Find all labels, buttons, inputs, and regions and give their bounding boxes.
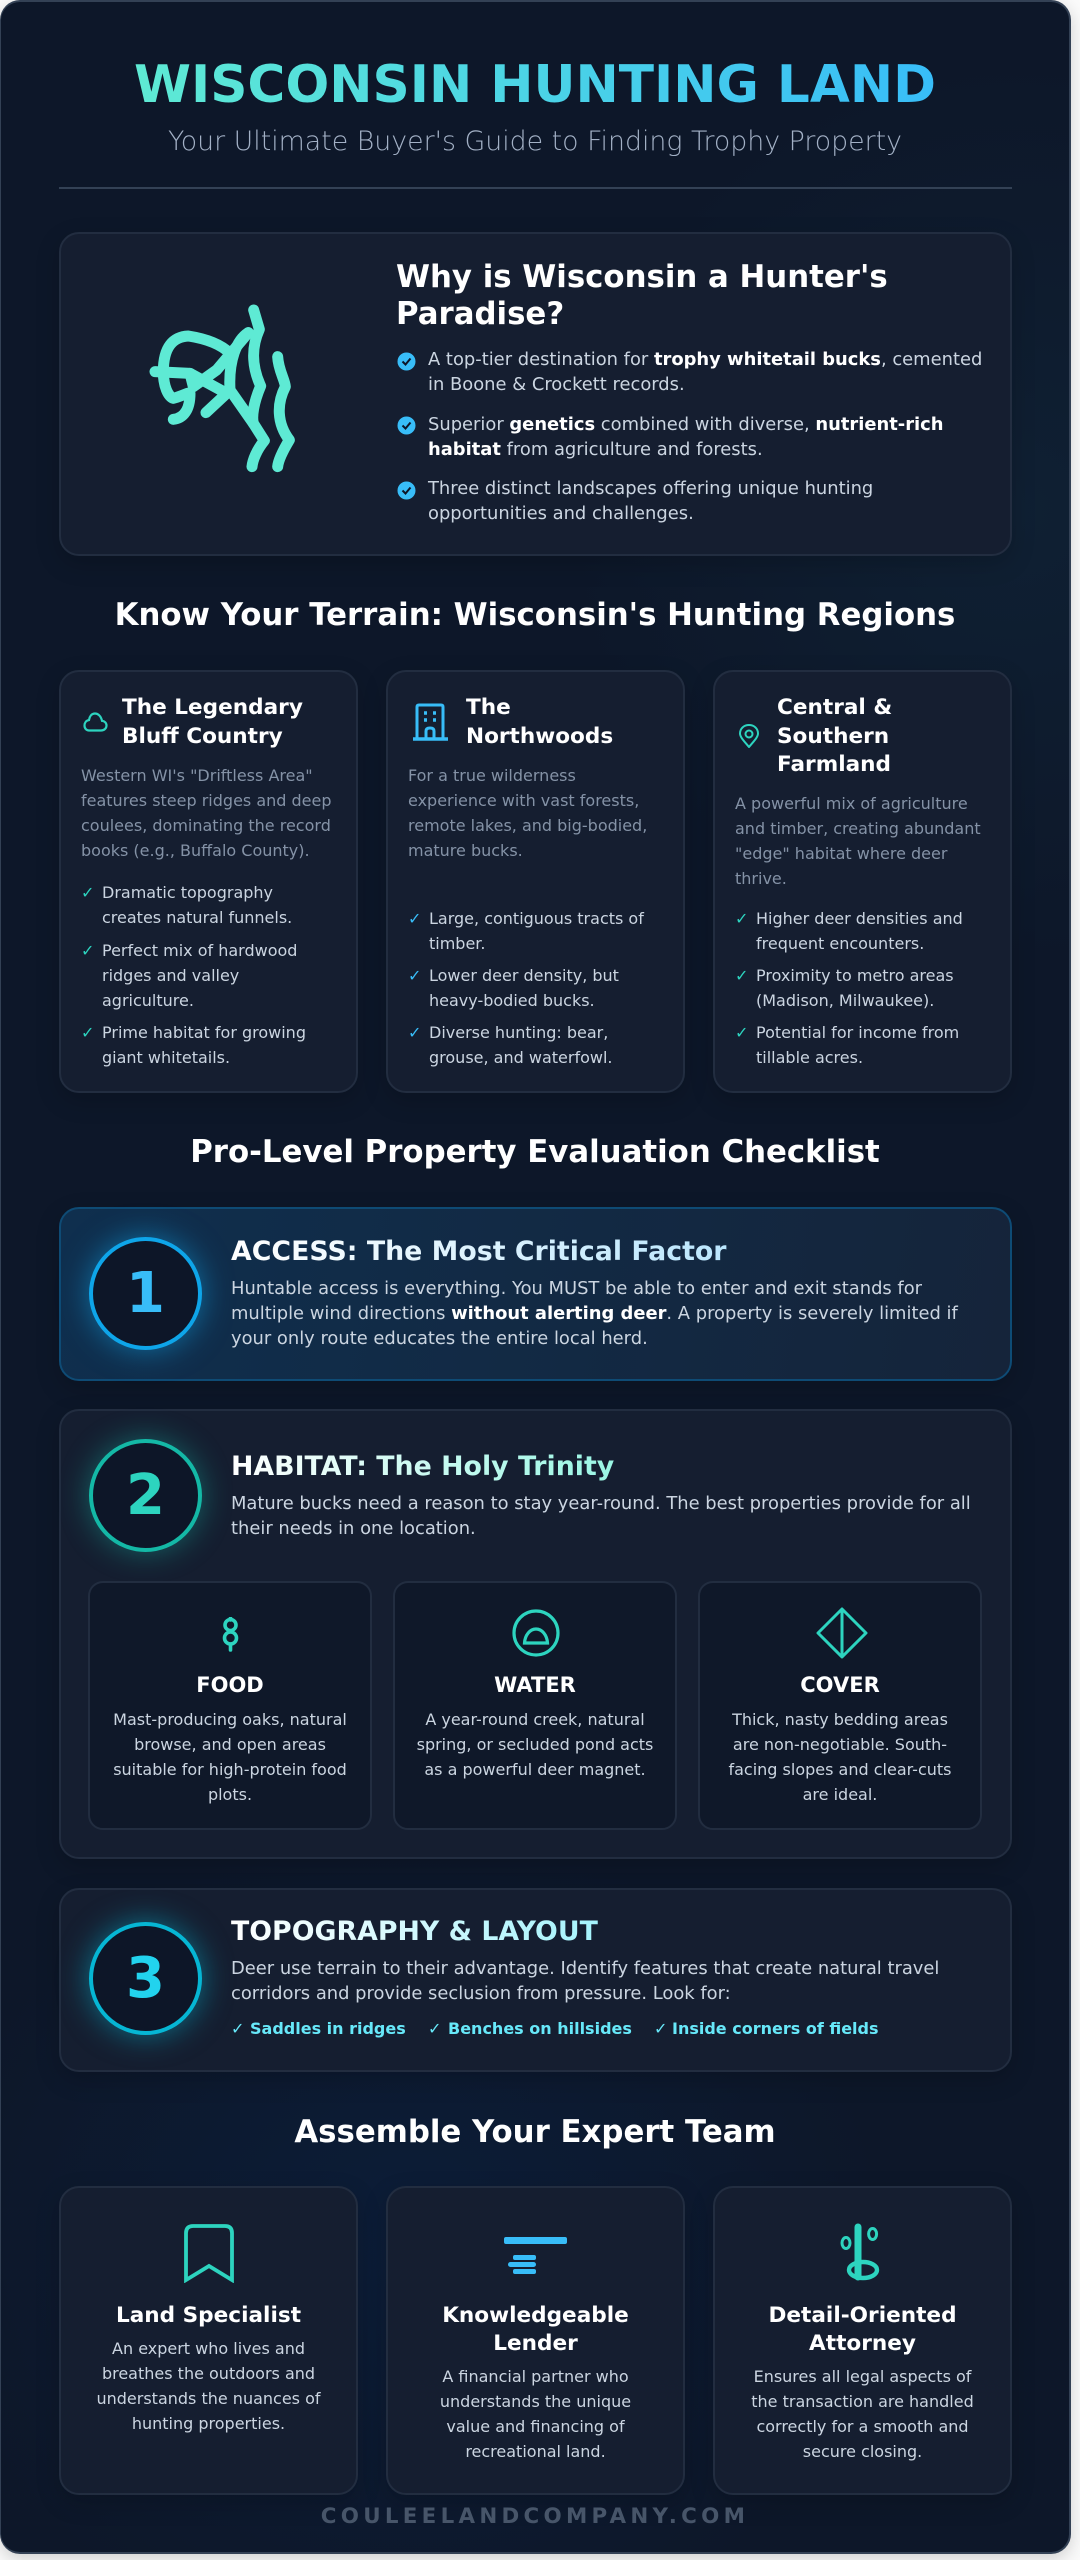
region list: Dramatic topography — [102, 883, 273, 902]
panel: northwoods: ✓ — [408, 908, 421, 928]
footer: COULEELANDCOMPANY.COM — [321, 2504, 749, 2529]
panel: bluff country: ✓ — [81, 940, 94, 960]
region list item 2: Proximity to metro areas — [756, 966, 954, 984]
region list item 3: grouse, and waterfowl. — [429, 1048, 612, 1066]
water text — [417, 1710, 653, 1779]
region list item 3 — [408, 1022, 612, 1066]
region list: Higher deer densities and — [756, 908, 963, 928]
reason 2 — [428, 414, 944, 460]
topography text — [231, 1958, 939, 2004]
number 1 — [89, 1237, 202, 1350]
access text: your only route educates the entire local herd. — [231, 1328, 648, 1349]
region list item 3: Prime habitat for growing — [102, 1022, 306, 1042]
number 3 — [89, 1922, 202, 2035]
role text: correctly for a smooth and — [756, 2417, 969, 2436]
panel: attorney — [713, 2186, 1012, 2495]
reason 2: Superior genetics combined with diverse, nutrient-rich — [428, 414, 944, 434]
habitat text: Mature bucks need a reason to stay year-round. The best properties provide for all — [231, 1493, 971, 1514]
region list item 3 — [735, 1022, 959, 1066]
icon: lender — [504, 2237, 568, 2277]
reason 1: in Boone & Crockett records. — [428, 374, 685, 395]
access text: Huntable access is everything. You MUST be able to enter and exit stands for — [231, 1278, 922, 1299]
role text: the transaction are handled — [751, 2392, 974, 2411]
icon: cover — [816, 1607, 868, 1659]
icon: attorney — [840, 2223, 886, 2283]
reason 2: habitat from agriculture and forests. — [428, 438, 763, 460]
region list item 2: agriculture. — [102, 990, 194, 1010]
region list item 2 — [735, 966, 954, 1010]
role text: breathes the outdoors and — [102, 2364, 315, 2382]
icon: deer and terrain — [150, 304, 295, 472]
cover title: COVER — [800, 1673, 880, 1697]
region description: experience with vast forests, — [408, 791, 639, 810]
card: cover — [698, 1581, 982, 1830]
access text: multiple wind directions without alerting deer. A property is severely limited if — [231, 1303, 958, 1324]
region title: Bluff Country — [122, 724, 283, 749]
region title: Farmland — [777, 752, 891, 777]
topography title: TOPOGRAPHY & LAYOUT — [231, 1916, 598, 1947]
region list item 2: Perfect mix of hardwood — [102, 940, 297, 960]
region title — [122, 695, 303, 749]
region list item 3: tillable acres. — [756, 1048, 863, 1066]
role title: Attorney — [809, 2331, 916, 2356]
region list: creates natural funnels. — [102, 908, 292, 927]
cover text: Thick, nasty bedding areas — [732, 1710, 948, 1729]
number 2 — [89, 1439, 202, 1552]
heading: team: Assemble Your Expert Team — [294, 2114, 776, 2150]
region list item 2: (Madison, Milwaukee). — [756, 990, 934, 1010]
role text: understands the nuances of — [96, 2388, 321, 2408]
panel: northwoods — [386, 670, 685, 1093]
region list item 3: giant whitetails. — [102, 1048, 230, 1066]
region title — [466, 695, 613, 749]
access text — [231, 1278, 958, 1349]
reason 3: Three distinct landscapes offering unique hunting — [428, 478, 873, 499]
icon: food — [222, 1617, 238, 1652]
region title: The — [466, 695, 511, 720]
reason 3 — [428, 478, 873, 524]
region title — [777, 695, 892, 777]
role text: value and financing of — [446, 2417, 625, 2436]
region list item 3: Potential for income from — [756, 1022, 959, 1042]
reason 1 — [428, 349, 982, 395]
subtitle: Your Ultimate Buyer's Guide to Finding Trophy Property — [168, 126, 902, 157]
panel: farmland: ✓ — [735, 966, 748, 984]
role title: Detail-Oriented — [768, 2302, 957, 2328]
divider — [59, 187, 1012, 189]
panel: topography — [59, 1888, 1012, 2072]
topography text: corridors and provide seclusion from pressure. Look for: — [231, 1983, 731, 2004]
cover text — [728, 1710, 952, 1804]
cover text: are ideal. — [803, 1785, 877, 1804]
region description: Western WI's "Driftless Area" — [81, 766, 313, 785]
role text: hunting properties. — [132, 2414, 285, 2432]
region description: "edge" habitat where deer — [735, 844, 947, 863]
title: WISCONSIN HUNTING LAND — [134, 55, 936, 115]
panel: farmland: ✓ — [735, 1022, 748, 1042]
icon: bookmark — [184, 2224, 234, 2283]
heading: why wisconsin — [396, 259, 888, 332]
panel: lender — [386, 2186, 685, 2495]
region list: Large, contiguous tracts of — [429, 908, 644, 928]
water title: WATER — [494, 1673, 576, 1697]
panel: habitat — [59, 1409, 1012, 1859]
heading: why wisconsin: Paradise? — [396, 296, 564, 332]
region list item 2: heavy-bodied bucks. — [429, 990, 595, 1010]
role title: Lender — [493, 2331, 578, 2356]
water text: as a powerful deer magnet. — [424, 1760, 646, 1779]
region description: and timber, creating abundant — [735, 819, 981, 838]
cover text: are non-negotiable. South- — [733, 1735, 947, 1754]
topography features — [231, 2019, 879, 2038]
region description: coulees, dominating the record — [81, 816, 331, 835]
icon: cloud — [83, 712, 108, 732]
role text: understands the unique — [440, 2392, 631, 2411]
reason 1: A top-tier destination for trophy whitetail bucks, cemented — [428, 349, 982, 370]
food text: browse, and open areas — [134, 1735, 326, 1754]
topography features: ✓ — [428, 2019, 441, 2038]
region list — [81, 883, 292, 927]
role text — [96, 2338, 321, 2432]
region list — [735, 908, 963, 952]
region description: features steep ridges and deep — [81, 791, 332, 810]
region list item 3: Diverse hunting: bear, — [429, 1022, 608, 1042]
habitat text: their needs in one location. — [231, 1518, 476, 1539]
region description: thrive. — [735, 869, 787, 888]
icon: building — [413, 704, 448, 741]
topography features: ✓ — [231, 2019, 244, 2038]
topography text: Deer use terrain to their advantage. Identify features that create natural travel — [231, 1958, 939, 1979]
number 2: 2 — [126, 1463, 165, 1528]
region description — [735, 794, 981, 888]
food text — [113, 1710, 347, 1804]
access title: ACCESS: The Most Critical Factor — [231, 1236, 727, 1267]
number 1: 1 — [126, 1261, 165, 1326]
region description: A powerful mix of agriculture — [735, 794, 968, 813]
region list — [408, 908, 644, 952]
region list item 2 — [81, 940, 297, 1010]
panel: farmland — [713, 670, 1012, 1093]
role title — [715, 2302, 1010, 2359]
role text — [715, 2364, 1010, 2464]
topography features: Benches on hillsides — [448, 2019, 632, 2038]
panel: land specialist — [59, 2186, 358, 2495]
card: food — [88, 1581, 372, 1830]
panel: bluff country: ✓ — [81, 883, 94, 902]
region description: mature bucks. — [408, 841, 523, 860]
role text: secure closing. — [803, 2442, 922, 2461]
panel: northwoods: ✓ — [408, 966, 421, 984]
habitat text — [231, 1493, 971, 1539]
region list: frequent encounters. — [756, 934, 924, 952]
food text: suitable for high-protein food — [113, 1760, 347, 1779]
check icon 1 — [398, 352, 416, 370]
region title: Central & — [777, 695, 892, 720]
region description: For a true wilderness — [408, 766, 576, 785]
panel: bluff country: ✓ — [81, 1022, 94, 1042]
region title: Northwoods — [466, 724, 613, 749]
water text: spring, or secluded pond acts — [417, 1735, 653, 1754]
region list item 2 — [408, 966, 619, 1010]
role text: A financial partner who — [442, 2367, 629, 2386]
region list: timber. — [429, 934, 486, 952]
region title: The Legendary — [122, 695, 303, 720]
cover text: facing slopes and clear-cuts — [728, 1760, 952, 1779]
card: water — [393, 1581, 677, 1830]
list: reasons — [398, 349, 982, 524]
check icon 2 — [398, 416, 416, 434]
food title: FOOD — [196, 1673, 264, 1697]
region list item 2: ridges and valley — [102, 966, 239, 984]
role title: Knowledgeable — [442, 2302, 629, 2328]
heading: regions: Know Your Terrain: Wisconsin's Hunting Regions — [115, 597, 955, 633]
role text — [388, 2364, 683, 2464]
role text: An expert who lives and — [112, 2338, 305, 2358]
region list item 3 — [81, 1022, 306, 1066]
icon: pin — [739, 724, 759, 748]
region title: Southern — [777, 724, 889, 749]
region description: books (e.g., Buffalo County). — [81, 841, 310, 860]
heading: checklist: Pro-Level Property Evaluation Checklist — [190, 1134, 880, 1170]
habitat title: HABITAT: The Holy Trinity — [231, 1451, 614, 1482]
panel: northwoods: ✓ — [408, 1022, 421, 1042]
check icon 3 — [398, 482, 416, 500]
role title — [388, 2302, 683, 2359]
role text: Ensures all legal aspects of — [754, 2367, 971, 2386]
water text: A year-round creek, natural — [425, 1710, 645, 1729]
reason 3: opportunities and challenges. — [428, 503, 694, 524]
panel: bluff country — [59, 670, 358, 1093]
region list item 2: Lower deer density, but — [429, 966, 619, 984]
role text: recreational land. — [465, 2442, 606, 2461]
region description — [81, 766, 332, 860]
panel: why wisconsin — [59, 232, 1012, 556]
topography features: Inside corners of fields — [672, 2019, 879, 2038]
region description: remote lakes, and big-bodied, — [408, 816, 647, 835]
number 3: 3 — [126, 1946, 165, 2011]
role title: Land Specialist — [116, 2302, 301, 2328]
food text: Mast-producing oaks, natural — [113, 1710, 347, 1729]
topography features: ✓ — [654, 2019, 667, 2038]
panel: farmland: ✓ — [735, 908, 748, 928]
food text: plots. — [208, 1785, 252, 1804]
region description — [408, 766, 647, 860]
heading: why wisconsin: Why is Wisconsin a Hunter's — [396, 259, 888, 295]
panel: access — [59, 1207, 1012, 1381]
topography features: Saddles in ridges — [250, 2019, 406, 2038]
icon: water — [512, 1609, 560, 1657]
